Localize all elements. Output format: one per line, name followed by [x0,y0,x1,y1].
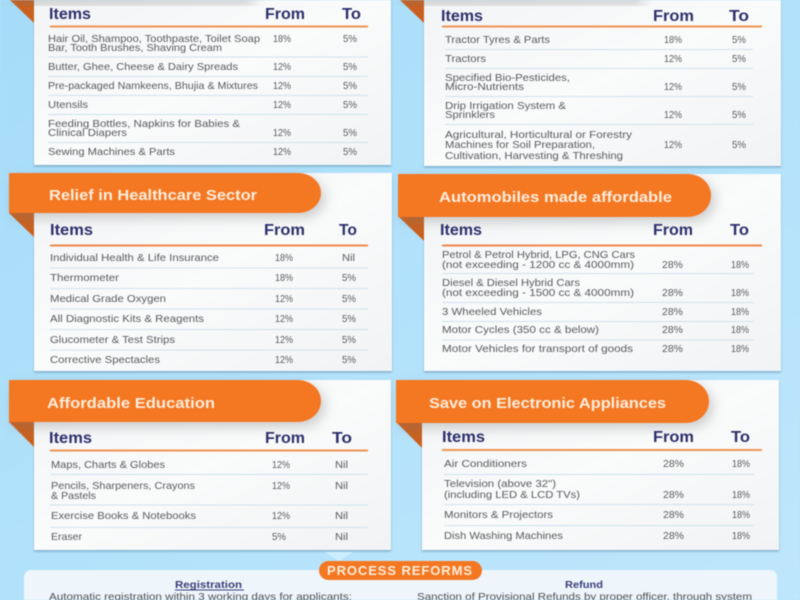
heading ribbon [9,380,321,422]
table rows: Nil [335,459,348,471]
ribbon fold [400,0,424,23]
table rows: 5% [272,531,286,543]
table rows: (not exceeding - 1500 cc & 4000mm) [442,287,634,299]
table rows: Cultivation, Harvesting & Threshing [445,150,623,162]
table rows: 18% [731,306,749,318]
table rows: Machines for Soil Preparation, [445,139,595,151]
table rows: 12% [664,81,682,93]
table header: From [265,6,305,23]
table rows: Nil [335,531,348,543]
table rows: 12% [664,109,682,121]
pale notch above pill [325,552,353,561]
table rows: Medical Grade Oxygen [50,293,166,305]
table rows: 12% [273,80,291,92]
table rows: Micro-Nutrients [445,81,524,93]
panel: automobiles made affordable [398,174,781,371]
table rows: 12% [275,354,293,366]
table rows: 12% [273,146,291,158]
table rows: 5% [343,80,357,92]
table rows: 28% [662,306,683,318]
heading ribbon: Affordable Education [47,395,215,412]
table header [49,430,368,452]
table rows: 12% [664,139,682,151]
table rows: 28% [663,530,684,542]
table rows: 5% [732,139,746,151]
table rows: 12% [275,334,293,346]
table rows: 12% [273,127,291,139]
table rows: 5% [732,34,746,46]
table rows: 12% [272,480,290,492]
refund text [417,579,752,600]
table rows: Pencils, Sharpeners, Crayons [51,480,195,492]
panel: agriculture items [400,0,781,166]
table rows: 18% [732,458,750,470]
table rows: Nil [335,510,348,522]
table header: From [653,429,694,446]
table header: From [265,430,305,447]
table header: To [731,429,750,446]
table rows: Tractor Tyres & Parts [445,34,550,46]
table rows: Eraser [51,531,82,543]
table rows: 18% [732,489,750,501]
table rows [48,33,368,158]
table rows: 12% [275,313,293,325]
table rows: Monitors & Projectors [444,509,553,521]
table header [440,222,762,246]
table rows: 5% [342,313,356,325]
table rows: 28% [663,458,684,470]
table rows: Petrol & Petrol Hybrid, LPG, CNG Cars [442,249,635,261]
table rows: Specified Bio-Pesticides, [445,72,570,84]
table header: Items [50,222,93,239]
table rows: Sprinklers [445,109,495,121]
table rows: 18% [273,33,291,45]
table rows: 5% [342,293,356,305]
table rows: (including LED & LCD TVs) [444,489,580,501]
table header: Items [440,222,482,239]
table rows: 5% [342,334,356,346]
heading ribbon: Automobiles made affordable [439,189,672,206]
table rows: 18% [275,272,293,284]
heading ribbon [398,174,711,217]
table header: To [339,222,357,239]
ribbon fold [397,423,422,448]
table header [441,8,762,28]
table rows: 18% [731,259,749,271]
table rows: 12% [272,510,290,522]
table header: From [653,222,693,239]
table rows: Glucometer & Test Strips [50,334,175,346]
table rows: 18% [275,252,293,264]
table rows: 5% [343,61,357,73]
table rows: Hair Oil, Shampoo, Toothpaste, Toilet Soap [48,33,260,45]
table header [442,429,762,451]
table rows: 5% [732,53,746,65]
table rows: Nil [342,252,355,264]
table rows: 18% [732,530,750,542]
panel: personal care and household items [10,0,391,165]
heading ribbon: Relief in Healthcare Sector [49,187,257,204]
table rows: 12% [273,61,291,73]
table rows: Tractors [445,53,486,65]
table rows: Corrective Spectacles [50,354,160,366]
table header: Items [442,429,485,446]
panel: relief in healthcare sector [9,173,392,371]
table rows: Feeding Bottles, Napkins for Babies & [48,118,240,130]
table rows: 12% [664,53,682,65]
table rows: 28% [662,324,683,336]
panel: save on electronic appliances [396,380,779,550]
ribbon fold [9,213,34,237]
table rows: 12% [273,99,291,111]
table header [50,222,368,246]
table rows: 18% [731,343,749,355]
panel: affordable education [9,380,391,550]
table rows: Nil [335,480,348,492]
heading ribbon [396,380,709,423]
table rows: Pre-packaged Namkeens, Bhujia & Mixtures [48,80,258,92]
table rows: Drip Irrigation System & [445,100,566,112]
table header: Items [441,8,483,25]
table header: To [342,6,361,23]
panel: process reforms [24,552,777,600]
table rows [444,458,754,542]
table rows: 5% [342,272,356,284]
table rows: Television (above 32") [444,478,556,490]
table rows: Individual Health & Life Insurance [50,252,219,264]
table header: Items [49,430,92,447]
table rows: 28% [662,259,683,271]
table rows: 5% [732,109,746,121]
table rows: Dish Washing Machines [444,530,563,542]
heading pill: PROCESS REFORMS [327,563,472,578]
table rows [445,34,753,162]
table rows: 18% [732,509,750,521]
table rows: 12% [275,293,293,305]
table rows: Thermometer [50,272,120,284]
refund text: Refund [565,579,603,591]
table rows: 5% [343,127,357,139]
table rows: 5% [343,146,357,158]
table rows: Agricultural, Horticultural or Forestry [445,129,633,141]
table rows: 3 Wheeled Vehicles [442,306,542,318]
table rows: 18% [664,34,682,46]
table rows [50,252,368,366]
table rows: 5% [343,33,357,45]
heading ribbon: Save on Electronic Appliances [429,395,666,412]
table rows: (not exceeding - 1200 cc & 4000mm) [442,259,634,271]
table rows: 28% [663,489,684,501]
table rows: 18% [731,287,749,299]
table rows: 28% [662,343,683,355]
table header: To [730,222,749,239]
table rows: 5% [343,99,357,111]
table rows: Exercise Books & Notebooks [51,510,196,522]
table rows: Utensils [48,99,88,111]
table header: From [653,8,694,25]
table header: Items [49,6,91,23]
registration text [49,579,352,600]
table rows [50,459,368,543]
registration text: Registration [175,579,242,591]
table rows: 12% [272,459,290,471]
table rows: 28% [662,287,683,299]
table rows: 5% [342,354,356,366]
table rows: Maps, Charts & Globes [51,459,165,471]
ribbon fold [10,0,34,23]
table rows: Butter, Ghee, Cheese & Dairy Spreads [48,61,238,73]
table rows: Clinical Diapers [48,127,127,139]
table rows: Sewing Machines & Parts [48,146,175,158]
table header: To [729,8,749,25]
ribbon fold [399,217,424,241]
table rows: Diesel & Diesel Hybrid Cars [442,277,580,289]
table header: To [332,430,352,447]
table header: From [264,222,305,239]
table rows: Air Conditioners [444,458,527,470]
heading ribbon [9,173,321,213]
table rows [442,249,754,355]
ribbon fold [9,422,34,447]
table rows: Motor Vehicles for transport of goods [442,343,633,355]
table rows: & Pastels [51,490,96,502]
table rows: All Diagnostic Kits & Reagents [50,313,204,325]
table header [49,6,368,28]
table rows: 18% [731,324,749,336]
table rows: 5% [732,81,746,93]
table rows: Motor Cycles (350 cc & below) [442,324,599,336]
table rows: 28% [663,509,684,521]
table rows: Bar, Tooth Brushes, Shaving Cream [48,42,222,54]
